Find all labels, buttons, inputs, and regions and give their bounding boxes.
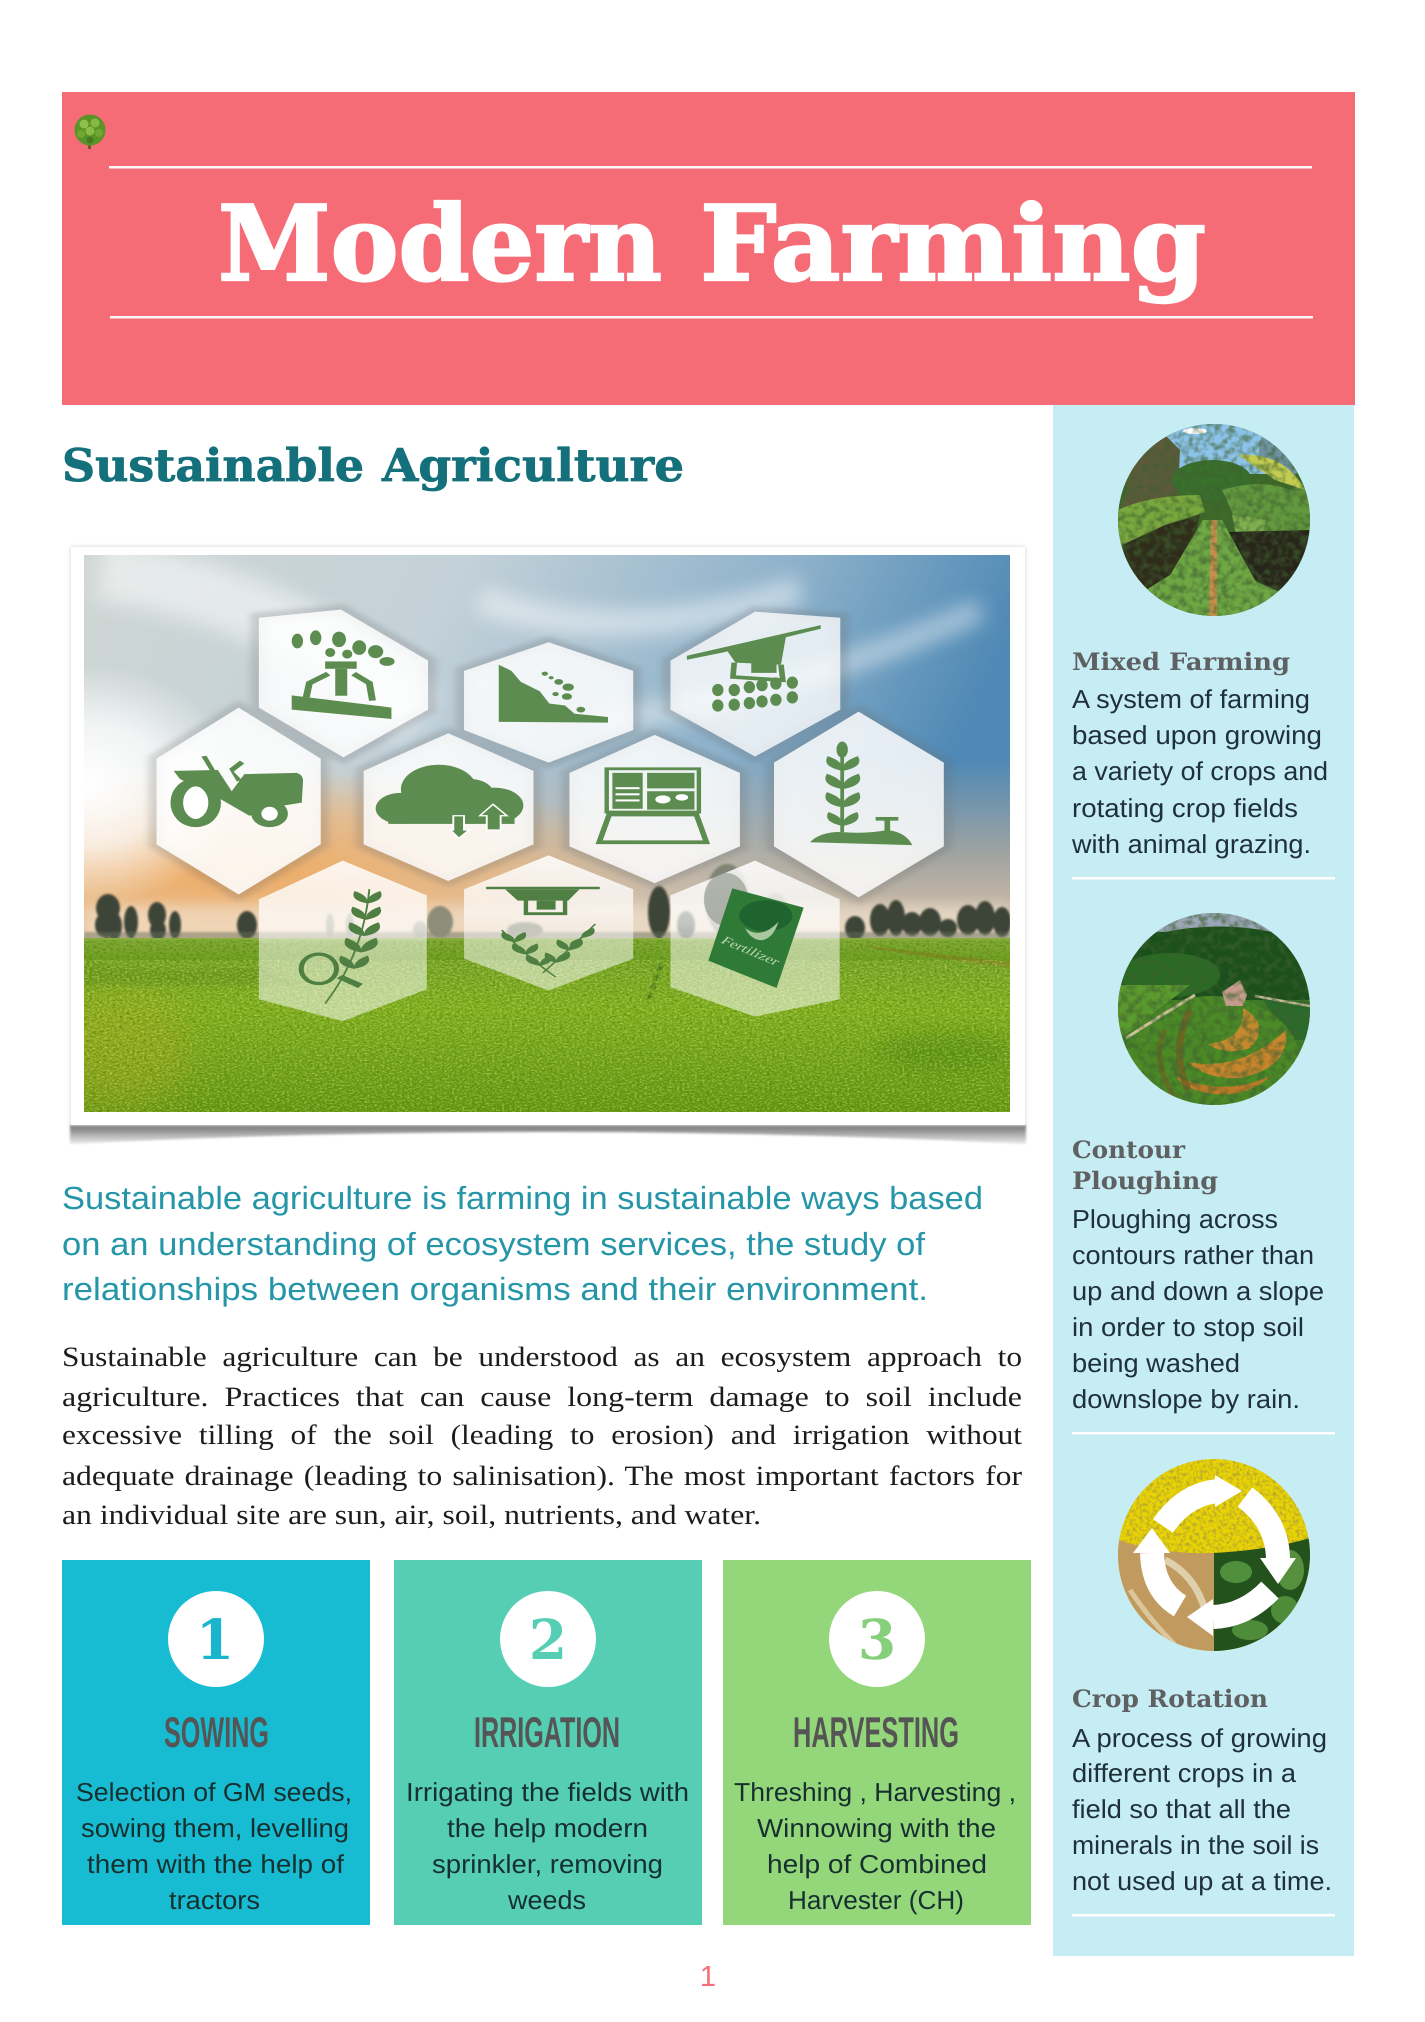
harvesting text: Threshing , Harvesting , (734, 1777, 1016, 1807)
body paragraph: Sustainable agriculture can be understood as an ecosystem approach to (62, 1342, 1022, 1373)
title text (218, 182, 1206, 305)
body paragraph: an individual site are sun, air, soil, nutrients, and water. (62, 1500, 761, 1531)
irrigation text: sprinkler, removing (432, 1849, 663, 1879)
section heading: Sustainable (62, 439, 364, 492)
rotation arrow heads (1133, 1475, 1296, 1636)
mixed farming text: based upon growing (1072, 720, 1322, 750)
body paragraph: agriculture. Practices that can cause long-term damage to soil include (62, 1382, 1022, 1413)
hexagon: fertilizer bag: Fertilizer (718, 934, 784, 968)
framed hero photo (0, 547, 1026, 1144)
crop rotation text: A process of growing (1072, 1723, 1327, 1753)
mixed farming text: A system of farming (1072, 684, 1310, 714)
body paragraph (62, 1342, 1023, 1531)
crop rotation text: not used up at a time. (1072, 1866, 1332, 1896)
sowing text: tractors (169, 1885, 260, 1915)
irrigation text: Irrigating the fields with (406, 1777, 689, 1807)
number badge 2: 2 (529, 1607, 567, 1672)
lead paragraph (62, 1180, 983, 1307)
hexagon: laptop (569, 735, 740, 883)
number badge 1: 1 (196, 1607, 234, 1672)
harvesting text: Harvester (CH) (788, 1885, 964, 1915)
hexagon: fertilizer bag (670, 861, 840, 1017)
mixed farming heading: Mixed Farming (1072, 647, 1290, 676)
card: harvesting (723, 1560, 1031, 1925)
contour ploughing heading (1072, 1135, 1218, 1195)
contour ploughing photo (1118, 913, 1310, 1105)
crop rotation text: field so that all the (1072, 1794, 1291, 1824)
crop rotation heading: Crop Rotation (1072, 1684, 1268, 1713)
contour ploughing text: Ploughing across (1072, 1204, 1278, 1234)
irrigation text: the help modern (447, 1813, 648, 1843)
contour ploughing text: being washed (1072, 1348, 1240, 1378)
crop rotation text (1072, 1723, 1332, 1896)
lead paragraph: on an understanding of ecosystem services, the study of (62, 1226, 925, 1262)
irrigation text: weeds (507, 1885, 586, 1915)
hexagon: plant with sensor (774, 712, 944, 897)
harvesting text: help of Combined (767, 1849, 987, 1879)
contour ploughing text: contours rather than (1072, 1240, 1314, 1270)
harvesting text: Winnowing with the (757, 1813, 996, 1843)
irrigation heading: IRRIGATION (474, 1709, 620, 1757)
number badge 2 (500, 1591, 596, 1687)
card: irrigation (394, 1560, 702, 1925)
hexagon: crop-spraying drone (670, 612, 840, 757)
section heading: Agriculture (381, 439, 684, 492)
contour ploughing text: downslope by rain. (1072, 1384, 1300, 1414)
sowing text: sowing them, levelling (81, 1813, 349, 1843)
sowing text (76, 1777, 352, 1915)
number badge 1 (168, 1591, 264, 1687)
mixed farming text (1071, 684, 1328, 859)
icon: rotation arrows (1152, 1491, 1278, 1617)
hexagon: soil erosion (464, 642, 633, 763)
contour ploughing text: in order to stop soil (1072, 1312, 1304, 1342)
irrigation text (406, 1777, 689, 1915)
crop rotation text: minerals in the soil is (1072, 1830, 1319, 1860)
lead paragraph: relationships between organisms and their environment. (62, 1271, 928, 1307)
mixed farming photo (1118, 422, 1310, 616)
crop rotation text: different crops in a (1072, 1758, 1297, 1788)
crop rotation photo (1118, 1459, 1310, 1651)
section heading (62, 439, 684, 492)
mixed farming text: a variety of crops and (1072, 756, 1328, 786)
body paragraph: excessive tilling of the soil (leading to erosion) and irrigation without (62, 1420, 1022, 1451)
lead paragraph: Sustainable agriculture is farming in sustainable ways based (62, 1180, 983, 1216)
sowing text: them with the help of (87, 1849, 345, 1879)
number badge 3: 3 (858, 1607, 896, 1672)
card: sowing (62, 1560, 370, 1925)
mixed farming text: with animal grazing. (1071, 829, 1311, 859)
mixed farming text: rotating crop fields (1072, 793, 1298, 823)
body paragraph: adequate drainage (leading to salinisation). The most important factors for (62, 1461, 1023, 1492)
hexagon: drone and crops (464, 855, 633, 990)
hexagon: tractor (157, 708, 321, 895)
sowing text: Selection of GM seeds, (76, 1777, 352, 1807)
title text: Farming (700, 182, 1206, 305)
harvesting heading: HARVESTING (793, 1709, 959, 1757)
sowing heading: SOWING (164, 1709, 269, 1757)
tree line (95, 886, 1011, 940)
harvesting text (734, 1777, 1016, 1915)
hexagon: leaf inspection (259, 861, 427, 1021)
title text: Modern (218, 182, 662, 305)
page number: 1 (700, 1961, 716, 1993)
hexagon: cloud (364, 733, 533, 881)
contour ploughing text: up and down a slope (1072, 1276, 1324, 1306)
number badge 3 (829, 1591, 925, 1687)
contour ploughing heading: Contour (1072, 1135, 1185, 1164)
hexagon: sprinkler (259, 610, 428, 757)
hexagon cluster (157, 610, 944, 1021)
sidebar panel (1053, 405, 1354, 1956)
contour ploughing heading: Ploughing (1072, 1166, 1218, 1195)
title banner (62, 92, 1355, 405)
contour ploughing text (1072, 1204, 1324, 1414)
icon: tree (74, 114, 106, 149)
